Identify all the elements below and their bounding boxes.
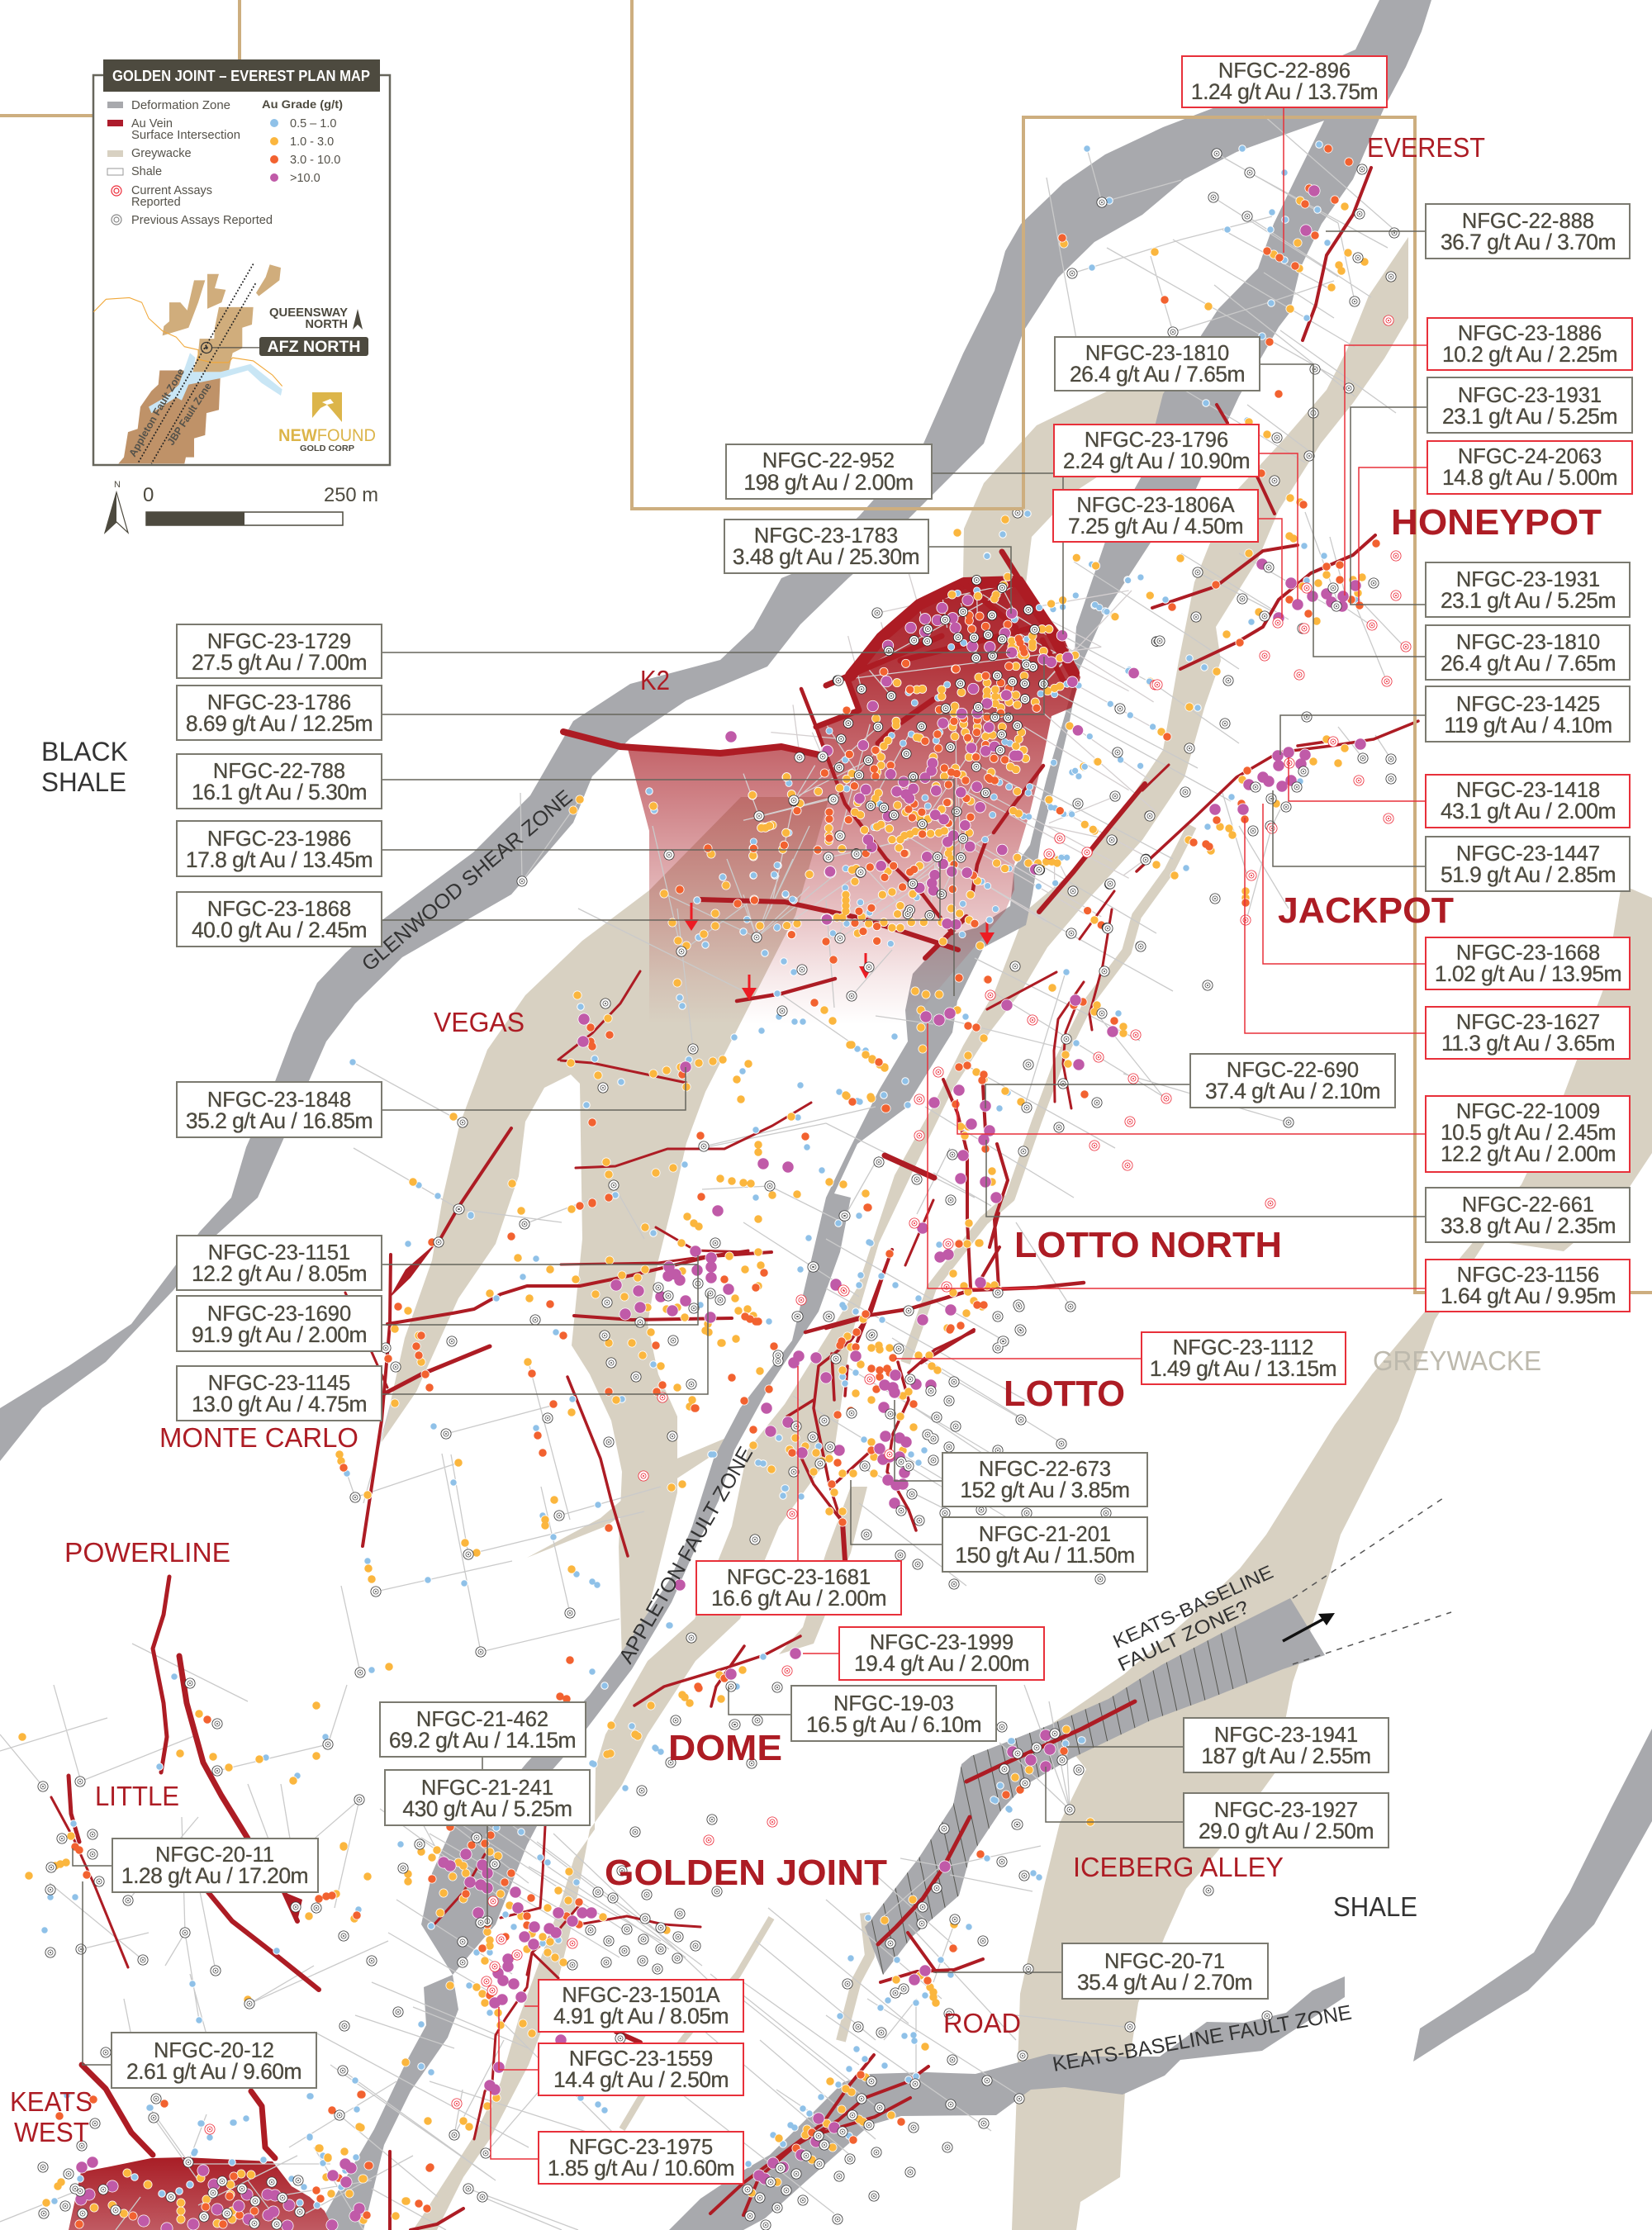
heading: BLACK SHALE: BLACK [41, 737, 128, 766]
K2 assay dots [747, 556, 1156, 947]
scale bar [143, 484, 378, 525]
callout: NFGC-23-1786 [177, 686, 382, 740]
callout: NFGC-22-690: 37.4 g/t Au / 2.10m [1205, 1079, 1380, 1103]
callout: NFGC-23-1941 [1184, 1718, 1389, 1772]
callout: NFGC-23-1931 Honeypot: 23.1 g/t Au / 5.25m [1441, 588, 1616, 613]
heading: VEGAS: VEGAS [434, 1007, 525, 1037]
legend: Au grade: 1.0 - 3.0 [290, 135, 334, 149]
legend: Au grade: 3.0 - 10.0 [290, 154, 340, 167]
callout: NFGC-22-952 [726, 444, 932, 499]
callout: NFGC-23-1447: NFGC-23-1447 [1456, 842, 1600, 866]
callout: NFGC-24-2063 [1427, 441, 1632, 494]
callout: NFGC-23-1418: NFGC-23-1418 [1456, 779, 1600, 802]
callout: NFGC-23-1112: NFGC-23-1112 [1173, 1336, 1313, 1359]
legend title [103, 59, 380, 92]
callout: NFGC-22-673 [942, 1453, 1147, 1506]
inset location map: Appleton Fault Zone [126, 367, 187, 459]
callout: NFGC-23-1690: 91.9 g/t Au / 2.00m [192, 1322, 367, 1347]
callout: NFGC-19-03 [791, 1686, 996, 1741]
callout: NFGC-21-462: 69.2 g/t Au / 14.15m [389, 1728, 576, 1753]
legend: Au grade: Au Grade (g/t) [262, 98, 343, 111]
deformation zone: Glenwood Shear Zone [0, 0, 1431, 1461]
callout: NFGC-23-1425: NFGC-23-1425 [1456, 693, 1600, 716]
core drill traces [743, 572, 1156, 942]
callout: NFGC-23-1501A: 4.91 g/t Au / 8.05m [553, 2004, 729, 2028]
callout: NFGC-23-1501A [539, 1980, 743, 2032]
callout: NFGC-23-1986 [177, 821, 382, 876]
Newfound Gold logo: GOLD CORP [300, 444, 354, 453]
callout: NFGC-22-896: 1.24 g/t Au / 13.75m [1191, 79, 1378, 104]
heading: EVEREST: EVEREST [1367, 132, 1485, 163]
callout: NFGC-23-1999: 19.4 g/t Au / 2.00m [854, 1651, 1029, 1676]
callout: NFGC-23-1999: NFGC-23-1999 [870, 1631, 1014, 1654]
callout: NFGC-23-1868: 40.0 g/t Au / 2.45m [192, 918, 367, 942]
callout: NFGC-23-1941: 187 g/t Au / 2.55m [1201, 1744, 1371, 1768]
callout: NFGC-23-1868: NFGC-23-1868 [207, 898, 351, 921]
dip arrows [684, 903, 995, 1000]
callout: NFGC-23-1931: NFGC-23-1931 [1458, 384, 1602, 407]
dashed fault extensions [1293, 1497, 1451, 1664]
callout: NFGC-20-11: NFGC-20-11 [155, 1843, 274, 1867]
callout: NFGC-23-1668 [1426, 937, 1630, 989]
callout: NFGC-22-896 [1182, 56, 1387, 107]
Keats West red vein surface [69, 2157, 334, 2230]
heading: LOTTO NORTH: LOTTO NORTH [1014, 1225, 1282, 1265]
callout: NFGC-23-1425 [1426, 686, 1630, 742]
callout: NFGC-23-1927: NFGC-23-1927 [1214, 1799, 1358, 1822]
callout: NFGC-23-1931: 23.1 g/t Au / 5.25m [1442, 404, 1617, 429]
drill hole collars [43, 154, 1406, 2225]
callout: NFGC-22-788: NFGC-22-788 [213, 760, 345, 783]
callout: NFGC-23-1729: NFGC-23-1729 [207, 630, 351, 653]
callout: NFGC-23-1796: NFGC-23-1796 [1085, 429, 1228, 452]
inset location map: JBP Fault Zone [165, 381, 214, 448]
legend: Au grade [262, 98, 343, 185]
gold vein surface intersections [51, 168, 1418, 2230]
callout: NFGC-22-888: 36.7 g/t Au / 3.70m [1441, 230, 1616, 254]
callout: NFGC-22-788 [177, 754, 382, 809]
callout: NFGC-22-690 [1190, 1054, 1395, 1108]
callout: NFGC-23-1447: 51.9 g/t Au / 2.85m [1441, 862, 1616, 887]
callout: NFGC-23-1927 [1184, 1793, 1389, 1848]
callout: NFGC-23-1810 [1055, 337, 1260, 391]
callout: NFGC-22-1009 [1426, 1096, 1630, 1172]
callout: NFGC-23-1931 Honeypot [1426, 562, 1630, 617]
legend keys: Shale [131, 165, 162, 178]
callout: NFGC-23-1886: NFGC-23-1886 [1458, 322, 1602, 345]
callout: NFGC-23-1145: NFGC-23-1145 [208, 1372, 350, 1395]
callout: NFGC-21-241: NFGC-21-241 [421, 1777, 553, 1800]
callout: NFGC-20-71: 35.4 g/t Au / 2.70m [1077, 1970, 1252, 1995]
inset label: Queensway North: NORTH [305, 318, 348, 331]
callout: NFGC-21-241 [385, 1770, 590, 1825]
thin greywacke strips [622, 826, 1192, 2129]
callout: NFGC-23-1112 [1142, 1332, 1346, 1384]
callout: NFGC-23-1975 [539, 2132, 743, 2184]
callout: NFGC-23-1145: 13.0 g/t Au / 4.75m [192, 1392, 367, 1416]
callout: NFGC-23-1848: NFGC-23-1848 [207, 1089, 351, 1112]
heading: ROAD: ROAD [943, 2008, 1021, 2038]
vein wedges [284, 1242, 437, 1921]
callout: NFGC-20-71: NFGC-20-71 [1104, 1950, 1225, 1973]
callout: NFGC-22-1009: 12.2 g/t Au / 2.00m [1441, 1141, 1616, 1166]
callout: NFGC-21-462 [380, 1702, 586, 1757]
callout: NFGC-23-1848 [177, 1082, 382, 1137]
callout: NFGC-23-1931 Honeypot: NFGC-23-1931 [1456, 568, 1600, 591]
heading: DOME: DOME [668, 1728, 782, 1768]
callout: NFGC-23-1786: NFGC-23-1786 [207, 691, 351, 714]
heading: HONEYPOT: HONEYPOT [1391, 502, 1602, 543]
assay dots: previous and current [22, 145, 1376, 2228]
legend: Au grade: >10.0 [290, 172, 320, 185]
callout: NFGC-21-201: 150 g/t Au / 11.50m [955, 1543, 1135, 1568]
callout: NFGC-23-1418 [1426, 775, 1630, 828]
callout: NFGC-23-1806A [1053, 490, 1258, 542]
callout: NFGC-20-71 [1062, 1943, 1268, 1999]
callout: NFGC-22-1009: NFGC-22-1009 [1456, 1100, 1600, 1123]
callout: NFGC-23-1156: NFGC-23-1156 [1457, 1264, 1599, 1287]
greywacke units [382, 237, 1652, 2230]
callout: NFGC-23-1931 [1427, 377, 1632, 433]
heading: KEATS WEST: WEST [14, 2117, 89, 2147]
legend keys: Reported [131, 196, 181, 209]
callout: NFGC-23-1425: 119 g/t Au / 4.10m [1444, 713, 1612, 738]
callout: NFGC-22-673: 152 g/t Au / 3.85m [960, 1478, 1130, 1502]
callout: NFGC-23-1999 [839, 1627, 1044, 1680]
callout: NFGC-23-1806A: NFGC-23-1806A [1076, 494, 1235, 517]
K2 red shaded vein surface [628, 578, 1080, 1024]
north arrow [105, 480, 128, 533]
legend keys: Current Assays [131, 184, 212, 197]
callout: NFGC-19-03: 16.5 g/t Au / 6.10m [806, 1712, 981, 1737]
scale bar: 0 [143, 484, 154, 506]
callout: NFGC-20-11: 1.28 g/t Au / 17.20m [121, 1863, 308, 1888]
grey leader lines [73, 231, 1427, 2065]
callout: NFGC-23-1729 [177, 624, 382, 678]
heading: MONTE CARLO: MONTE CARLO [159, 1422, 358, 1453]
label: Keats-Baseline Fault Zone?: KEATS-BASELINE [1109, 1561, 1276, 1653]
inset location map [93, 263, 282, 463]
callout: NFGC-23-1810 Honeypot [1426, 625, 1630, 680]
callout: NFGC-23-1796 [1054, 425, 1259, 477]
arrow: fault movement [1283, 1613, 1335, 1641]
legend keys: Greywacke [131, 147, 192, 160]
callout: NFGC-23-1627: 11.3 g/t Au / 3.65m [1441, 1031, 1615, 1056]
callout: NFGC-22-661: NFGC-22-661 [1462, 1193, 1594, 1217]
callout: NFGC-23-1681 [696, 1561, 901, 1615]
heading: BLACK SHALE: SHALE [41, 767, 126, 797]
heading: SHALE: SHALE [1333, 1891, 1417, 1922]
callout: NFGC-23-1627 [1426, 1007, 1630, 1059]
callout: NFGC-23-1668: 1.02 g/t Au / 13.95m [1435, 961, 1621, 986]
callout: NFGC-21-201 [942, 1517, 1147, 1572]
callout: NFGC-23-1690 [177, 1296, 382, 1351]
label: Keats-Baseline Fault Zone: KEATS-BASELINE FAULT ZONE [1051, 2001, 1353, 2076]
callout: NFGC-23-1783: NFGC-23-1783 [754, 524, 898, 548]
callout: NFGC-24-2063: NFGC-24-2063 [1458, 445, 1602, 468]
callout: NFGC-23-1729: 27.5 g/t Au / 7.00m [192, 650, 367, 675]
Newfound Gold logo [278, 392, 376, 453]
callout: NFGC-23-1501A: NFGC-23-1501A [562, 1984, 720, 2007]
callout: NFGC-23-1668: NFGC-23-1668 [1456, 942, 1600, 965]
callout: NFGC-23-1681: 16.6 g/t Au / 2.00m [711, 1586, 886, 1611]
callout: NFGC-23-1559: NFGC-23-1559 [569, 2047, 713, 2071]
deformation zone: east shale band [1413, 1729, 1652, 2062]
callout: NFGC-22-788: 16.1 g/t Au / 5.30m [192, 780, 367, 804]
callout: NFGC-23-1986: NFGC-23-1986 [207, 828, 351, 851]
callout: NFGC-22-661 [1426, 1188, 1630, 1242]
red leader lines [491, 107, 1427, 2159]
callout: NFGC-22-661: 33.8 g/t Au / 2.35m [1441, 1213, 1616, 1238]
legend keys: Previous Assays Reported [131, 214, 273, 227]
callout: NFGC-23-1810: NFGC-23-1810 [1085, 342, 1229, 365]
label: Keats-Baseline Fault Zone? [1109, 1561, 1276, 1676]
callout: NFGC-23-1559 [539, 2043, 743, 2095]
inset label: Queensway North [269, 306, 363, 331]
callout: NFGC-19-03: NFGC-19-03 [833, 1692, 954, 1715]
callout: NFGC-23-1112: 1.49 g/t Au / 13.15m [1150, 1356, 1336, 1381]
label: Glenwood Shear Zone: GLENWOOD SHEAR ZONE [358, 785, 577, 976]
callout: NFGC-23-1447 [1426, 837, 1630, 891]
callout: NFGC-23-1886 [1427, 318, 1632, 370]
callout: NFGC-22-888: NFGC-22-888 [1462, 210, 1594, 233]
legend title: GOLDEN JOINT – EVEREST PLAN MAP [112, 67, 370, 84]
heading: ICEBERG ALLEY: ICEBERG ALLEY [1073, 1852, 1284, 1882]
legend keys: Deformation Zone [131, 99, 230, 112]
callout: NFGC-23-1151: NFGC-23-1151 [208, 1241, 350, 1264]
callout: NFGC-23-1986: 17.8 g/t Au / 13.45m [186, 847, 373, 872]
inset label: AFZ North: AFZ NORTH [268, 339, 360, 356]
callout: NFGC-22-896: NFGC-22-896 [1218, 59, 1351, 83]
callout: NFGC-24-2063: 14.8 g/t Au / 5.00m [1442, 465, 1617, 490]
deformation zone: Appleton Fault Zone [316, 0, 1431, 2230]
callout: NFGC-21-462: NFGC-21-462 [416, 1708, 548, 1731]
callout: NFGC-23-1975: 1.85 g/t Au / 10.60m [548, 2156, 734, 2180]
heading: LITTLE: LITTLE [95, 1781, 179, 1811]
callout: NFGC-23-1145 [177, 1366, 382, 1421]
callout: NFGC-23-1156: 1.64 g/t Au / 9.95m [1441, 1283, 1616, 1308]
heading: GREYWACKE: GREYWACKE [1373, 1345, 1541, 1376]
heading: JACKPOT: JACKPOT [1278, 890, 1454, 931]
Newfound Gold logo: NEWFOUND [278, 426, 376, 445]
callout: NFGC-23-1151: 12.2 g/t Au / 8.05m [192, 1261, 367, 1286]
north arrow: N [114, 480, 121, 490]
callout: NFGC-23-1783: 3.48 g/t Au / 25.30m [733, 544, 919, 569]
callout: NFGC-20-12: 2.61 g/t Au / 9.60m [126, 2059, 301, 2084]
callout: NFGC-23-1886: 10.2 g/t Au / 2.25m [1442, 342, 1617, 367]
inset label: Queensway North: QUEENSWAY [269, 306, 348, 320]
heading: GOLDEN JOINT: GOLDEN JOINT [605, 1853, 887, 1893]
callout: NFGC-23-1796: 2.24 g/t Au / 10.90m [1063, 448, 1250, 473]
callout: NFGC-23-1848: 35.2 g/t Au / 16.85m [186, 1108, 373, 1133]
callout: NFGC-23-1418: 43.1 g/t Au / 2.00m [1441, 799, 1616, 823]
callout: NFGC-23-1627: NFGC-23-1627 [1456, 1011, 1600, 1034]
deformation zone: Keats-Baseline Fault Zone? hatched [865, 1598, 1325, 1975]
callout: NFGC-23-1156 [1426, 1260, 1630, 1312]
heading: LOTTO: LOTTO [1004, 1374, 1125, 1414]
legend: Au grade: 0.5 – 1.0 [290, 117, 336, 130]
callout: NFGC-23-1783 [724, 520, 928, 573]
callout: NFGC-22-888 [1426, 204, 1630, 259]
deformation zone: Keats-Baseline Fault Zone [669, 1976, 1345, 2230]
callout: NFGC-22-690: NFGC-22-690 [1227, 1059, 1359, 1082]
heading: KEATS WEST [10, 2086, 93, 2147]
heading: KEATS WEST: KEATS [10, 2086, 93, 2117]
callout: NFGC-22-673: NFGC-22-673 [979, 1458, 1111, 1481]
callout: NFGC-21-201: NFGC-21-201 [979, 1523, 1111, 1546]
callout: NFGC-23-1786: 8.69 g/t Au / 12.25m [186, 711, 373, 736]
callout: NFGC-23-1151 [177, 1236, 382, 1290]
callout: NFGC-23-1806A: 7.25 g/t Au / 4.50m [1068, 514, 1243, 539]
callout: NFGC-22-952: NFGC-22-952 [762, 449, 895, 472]
heading: POWERLINE: POWERLINE [64, 1537, 230, 1568]
callout: NFGC-20-12 [112, 2033, 316, 2088]
heading: BLACK SHALE [41, 737, 128, 797]
callout: NFGC-23-1810 Honeypot: 26.4 g/t Au / 7.65m [1441, 651, 1616, 676]
label: Appleton Fault Zone: APPLETON FAULT ZONE [615, 1443, 757, 1668]
scale bar: 250 m [324, 484, 378, 506]
callout: NFGC-23-1810 Honeypot: NFGC-23-1810 [1456, 631, 1600, 654]
callout: NFGC-23-1690: NFGC-23-1690 [207, 1302, 351, 1326]
legend keys: Surface Intersection [131, 129, 240, 142]
legend keys: Au Vein [131, 117, 173, 130]
callout: NFGC-22-952: 198 g/t Au / 2.00m [743, 470, 914, 495]
callout: NFGC-22-1009: 10.5 g/t Au / 2.45m [1441, 1120, 1616, 1145]
legend keys [107, 99, 273, 227]
callout: NFGC-20-11 [112, 1839, 318, 1892]
callout: NFGC-23-1810: 26.4 g/t Au / 7.65m [1070, 362, 1245, 387]
callout: NFGC-23-1941: NFGC-23-1941 [1214, 1724, 1358, 1747]
callout: NFGC-23-1681: NFGC-23-1681 [727, 1566, 871, 1589]
callout: NFGC-20-12: NFGC-20-12 [154, 2039, 274, 2062]
label: Keats-Baseline Fault Zone?: FAULT ZONE? [1114, 1596, 1252, 1676]
callout: NFGC-23-1559: 14.4 g/t Au / 2.50m [553, 2067, 729, 2092]
panel: legend [93, 59, 390, 465]
heading: K2: K2 [640, 665, 670, 695]
callout: NFGC-23-1868 [177, 892, 382, 947]
callout: NFGC-23-1927: 29.0 g/t Au / 2.50m [1199, 1819, 1374, 1843]
callout: NFGC-21-241: 430 g/t Au / 5.25m [402, 1796, 572, 1821]
callout: NFGC-23-1975: NFGC-23-1975 [569, 2136, 713, 2159]
project frame lines [0, 0, 1652, 1293]
